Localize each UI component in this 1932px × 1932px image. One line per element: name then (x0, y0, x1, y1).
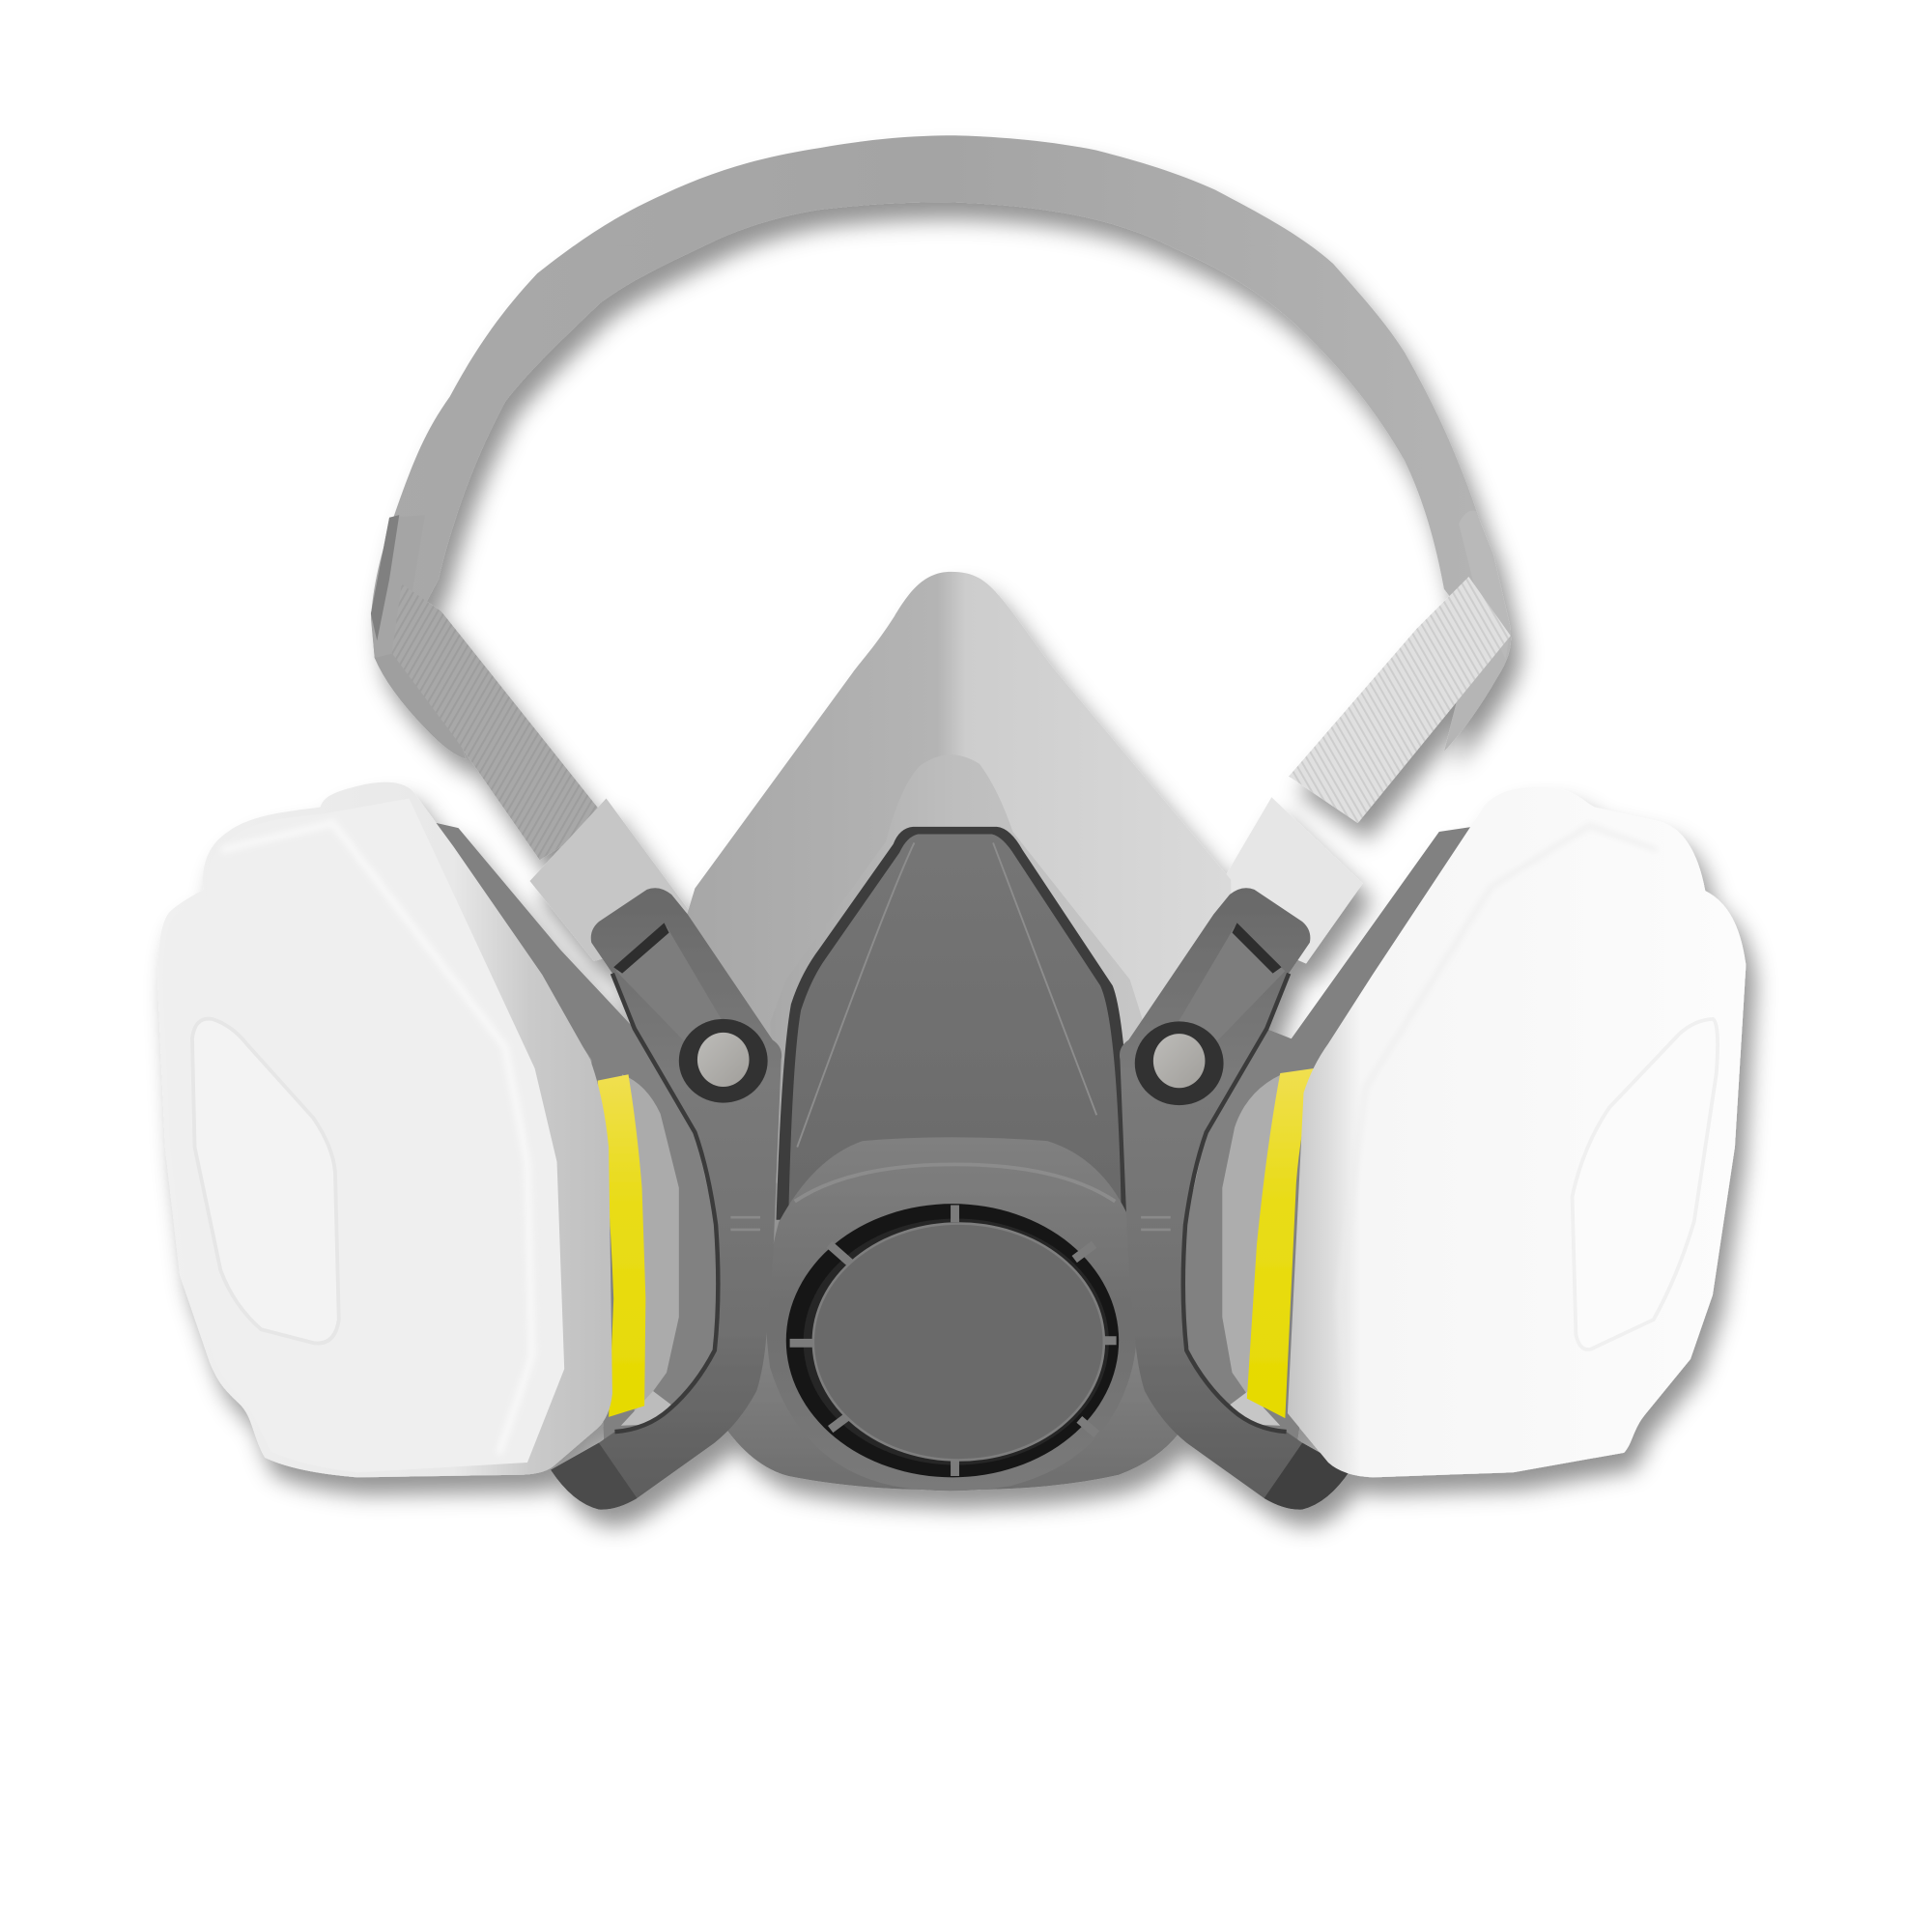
housing body (766, 1137, 1139, 1491)
cartridge body with rim (157, 782, 612, 1477)
lower cheek shell (708, 1182, 1189, 1490)
face piece (666, 572, 1233, 1490)
left strap clip (529, 799, 690, 961)
nose cone silhouette (666, 572, 1233, 1490)
cartridge inset panel (1573, 1019, 1718, 1350)
ribbed bottom edge (1264, 1443, 1350, 1510)
left yellow band (598, 1074, 645, 1417)
frame inner edge (1183, 974, 1289, 1432)
pivot button (697, 1033, 750, 1087)
body sliver (621, 1391, 672, 1426)
cartridge face ridge (1339, 826, 1658, 1460)
left elastic webbing (392, 584, 607, 860)
base inner body (622, 1074, 679, 1417)
head strap (371, 135, 1511, 860)
buckle slot (613, 923, 669, 974)
vent inner ring (804, 1218, 1109, 1465)
frame grip marks (1141, 1217, 1171, 1230)
filter housing (766, 1137, 1139, 1491)
base inner body (1222, 1074, 1282, 1417)
left strap buckle (371, 515, 425, 658)
base shell (431, 822, 719, 1441)
lower right band behind strap (1444, 579, 1511, 752)
frame arm (1120, 888, 1350, 1510)
headband arc (371, 135, 1511, 658)
right side frame (1120, 888, 1350, 1510)
buckle plate (1175, 926, 1285, 1047)
buckle slot (1233, 923, 1282, 974)
right elastic webbing (1289, 577, 1511, 823)
right filter cartridge (1288, 786, 1746, 1477)
frame inner edge (612, 974, 718, 1432)
pivot button (1153, 1034, 1205, 1088)
right yellow band (1247, 1068, 1315, 1418)
body sliver (1229, 1391, 1280, 1426)
left filter cartridge (157, 782, 612, 1477)
exhalation plate (788, 835, 1122, 1213)
left side frame (551, 888, 781, 1510)
right cartridge base (1182, 827, 1472, 1441)
ribbed bottom edge (551, 1443, 637, 1510)
cartridge ridge (222, 823, 532, 1454)
collar ridge around plate (770, 754, 1144, 1220)
frame arm (551, 888, 781, 1510)
cartridge inset panel (192, 1019, 339, 1344)
right strap buckle (1459, 511, 1511, 659)
vent slot ring (786, 1204, 1119, 1477)
plate inner crease (797, 842, 1096, 1148)
filter cap (813, 1224, 1104, 1460)
buckle plate (616, 926, 727, 1047)
cartridge body with rim (1288, 786, 1746, 1477)
pivot ring (1135, 1021, 1224, 1105)
respirator group (157, 135, 1746, 1510)
lower left band behind strap (375, 579, 466, 759)
left cartridge base (431, 822, 719, 1441)
pivot ring (679, 1019, 768, 1103)
cartridge white face edge (162, 799, 564, 1472)
left buckle dark edge (371, 515, 399, 640)
exhalation plate outline (777, 827, 1133, 1220)
frame grip marks (730, 1217, 760, 1230)
base shell (1182, 827, 1472, 1441)
vent ribs (790, 1205, 1117, 1476)
housing ridge (795, 1164, 1115, 1202)
right strap clip (1205, 797, 1363, 963)
